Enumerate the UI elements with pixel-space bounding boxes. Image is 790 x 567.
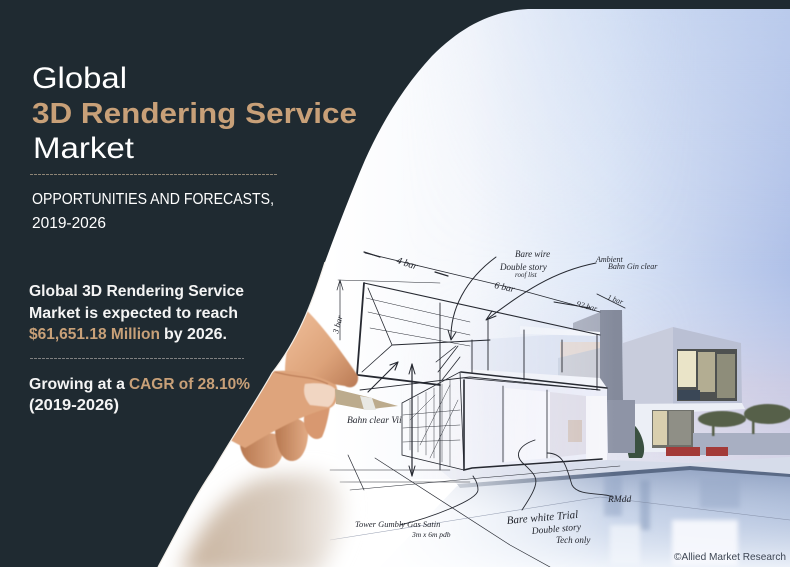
ring finger — [240, 433, 283, 468]
handwritten annotations: Bare white Trial — [506, 509, 579, 527]
pool reflection — [604, 476, 740, 566]
roof lines — [365, 253, 600, 312]
callout: growth rate — [29, 376, 250, 414]
handwritten annotations: 1 bar — [606, 292, 625, 306]
white curve edge — [158, 262, 325, 567]
grey column — [573, 312, 600, 332]
index finger — [285, 307, 358, 387]
dimension lines — [337, 280, 343, 340]
glass box — [402, 372, 464, 470]
ground floor glass — [475, 389, 607, 469]
handwritten annotations: Bare wire — [515, 249, 550, 259]
callout: growth rate: (2019-2026) — [29, 397, 119, 414]
handwritten annotations: 3 bar — [330, 314, 345, 335]
third finger — [304, 405, 330, 439]
plant — [627, 425, 644, 458]
right wing windows — [677, 349, 737, 401]
title line: Market: Market — [33, 132, 134, 165]
thumbnail — [304, 383, 335, 407]
callout: growth rate: Growing at a — [29, 376, 125, 393]
callout: market size: $61,651.18 Million — [29, 326, 160, 343]
deck — [442, 460, 707, 484]
main slab — [470, 370, 607, 390]
illustration: rendered house and pool — [441, 310, 790, 567]
divider: callouts — [30, 358, 244, 360]
sketch linework over building — [330, 252, 790, 567]
callout: market size: by 2026. — [164, 326, 227, 343]
divider: title — [30, 174, 278, 176]
handwritten annotations: roof list — [515, 271, 538, 279]
callout arrows — [448, 257, 496, 340]
red sofas — [666, 447, 728, 456]
pencil — [335, 389, 398, 410]
handwritten annotations: 3m x 6m pdb — [411, 530, 451, 539]
handwritten annotations: 92 bar — [575, 299, 599, 314]
handwritten annotations: Tech only — [556, 535, 590, 545]
title line: Global: Global — [32, 62, 127, 95]
middle finger — [275, 417, 308, 461]
callout: market size: Market is expected to reach — [29, 305, 238, 322]
handwritten annotations: Bahn clear Vii — [347, 416, 402, 426]
hand holding pencil — [180, 307, 398, 567]
hand shadow — [180, 474, 344, 567]
thumb — [230, 371, 338, 448]
panel: photo background of sky — [150, 9, 790, 567]
handwritten annotations: Ambient — [595, 255, 623, 264]
title line: 3D Rendering Service: 3D Rendering Service — [32, 98, 357, 130]
copyright credit: ©Allied Market Research — [674, 551, 786, 563]
palm and fingers — [230, 307, 358, 468]
callout: market size: Global 3D Rendering Service — [29, 283, 244, 300]
handwritten annotations: 4 bar — [395, 255, 419, 272]
handwritten annotations: RMdd — [607, 495, 631, 505]
handwritten annotations: Tower Gumbly Gas Satin — [355, 519, 440, 529]
hatching — [403, 379, 460, 466]
floor lines — [348, 455, 550, 567]
handwritten annotations: Double story — [530, 523, 582, 537]
callout: market size — [29, 283, 244, 343]
handwritten annotations: 6 bar — [493, 281, 516, 295]
handwritten annotations: Bahn Gin clear — [608, 262, 658, 271]
title — [32, 62, 357, 165]
tree — [698, 404, 790, 436]
right wing lower floor — [635, 403, 745, 452]
upper floor main house — [470, 335, 600, 374]
handwritten annotations — [330, 249, 658, 545]
pool water — [490, 470, 790, 567]
subtitle: opportunities and forecasts — [32, 191, 274, 232]
subtitle: opportunities and forecasts: 2019-2026 — [32, 215, 106, 232]
right wing of house — [623, 327, 673, 410]
garden wall — [693, 433, 790, 455]
handwritten annotations: Double story — [499, 262, 547, 272]
subtitle: opportunities and forecasts: OPPORTUNITIES AND FORECASTS, — [32, 191, 274, 208]
callout: growth rate: CAGR of 28.10% — [129, 376, 250, 393]
